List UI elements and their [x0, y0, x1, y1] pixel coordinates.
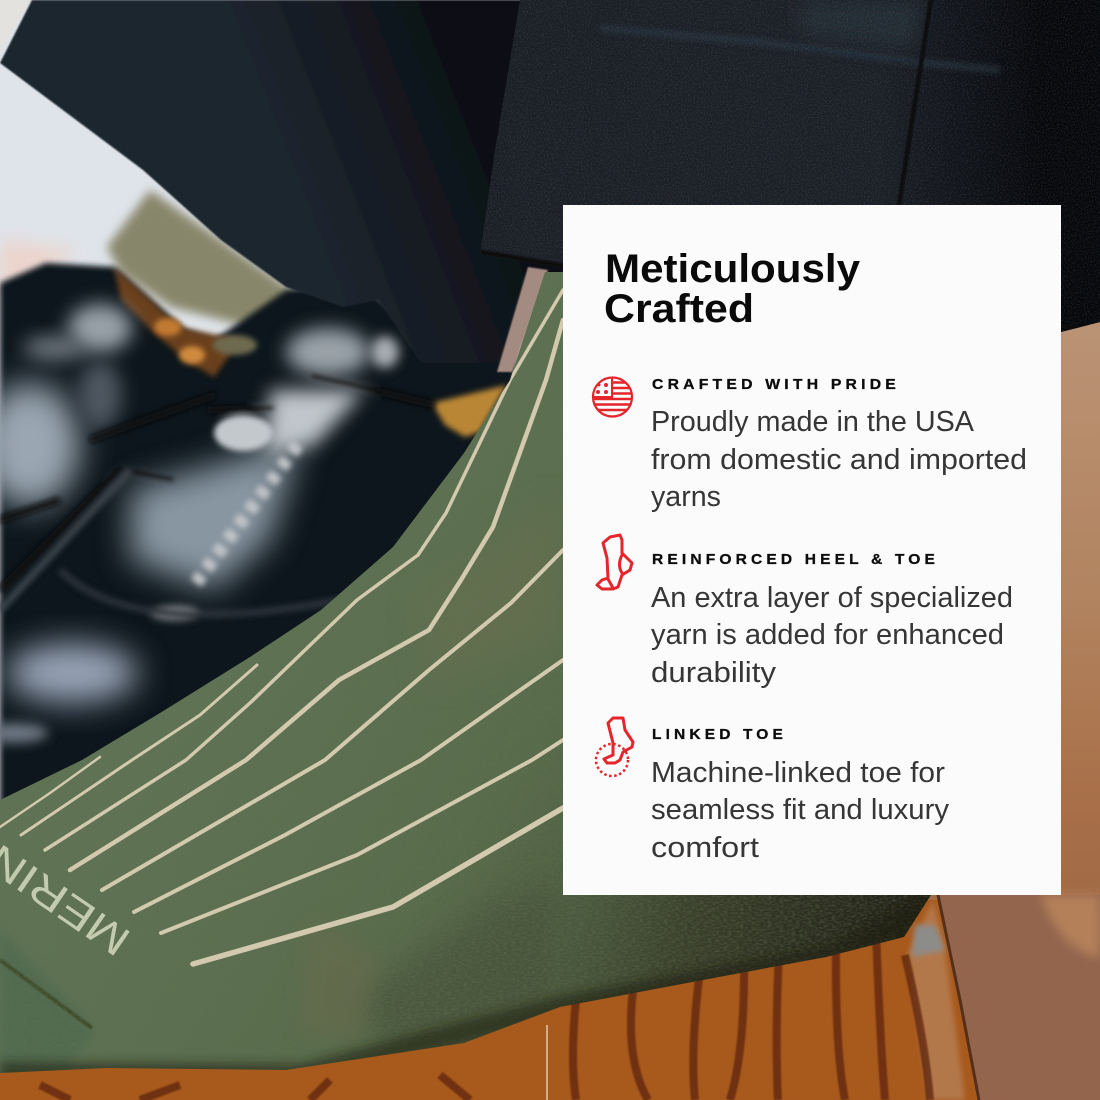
- body text: An extra layer of specialized: [651, 582, 1013, 614]
- blurred far sock: [107, 190, 296, 327]
- wood floor front: [0, 895, 1100, 1100]
- feature: reinforced heel and toe: [597, 535, 1013, 689]
- body text: [651, 582, 1013, 689]
- shoelace leather and tan laces: [114, 267, 240, 377]
- body text: durability: [651, 657, 777, 689]
- body text: yarn is added for enhanced: [651, 619, 1004, 651]
- back shoe highlights: [0, 304, 132, 507]
- wood floor right: [900, 320, 1100, 1100]
- feature: linked toe: [596, 718, 950, 864]
- front shoe highlights: [0, 328, 435, 743]
- title: Meticulously: [605, 247, 861, 291]
- sock ribs: [0, 290, 563, 964]
- title: [604, 247, 861, 331]
- body text: [651, 406, 1027, 513]
- body text: Machine-linked toe for: [651, 757, 946, 789]
- body text: [651, 757, 950, 864]
- heading: REINFORCED HEEL & TOE: [652, 551, 939, 568]
- left trouser leg: [0, 0, 570, 363]
- orange sliver behind sock: [432, 385, 507, 437]
- icon: sock heel and toe: [597, 535, 632, 589]
- skin sliver beside sock: [497, 267, 548, 372]
- shoes base: [0, 263, 515, 830]
- heading: LINKED TOE: [652, 726, 787, 743]
- title: Crafted: [604, 287, 754, 331]
- body text: seamless fit and luxury: [651, 794, 950, 826]
- body text: Proudly made in the USA: [651, 406, 974, 438]
- black cuffed trouser leg: [470, 0, 1100, 340]
- heading: CRAFTED WITH PRIDE: [652, 376, 900, 393]
- body text: from domestic and imported: [651, 444, 1027, 476]
- panel: features card: [563, 205, 1061, 895]
- icon: linked toe sock: [596, 718, 633, 776]
- icon: american flag: [590, 376, 634, 416]
- sock: [0, 272, 931, 1073]
- body text: yarns: [651, 481, 721, 513]
- body text: comfort: [651, 832, 759, 864]
- feature: crafted with pride: [590, 376, 1027, 513]
